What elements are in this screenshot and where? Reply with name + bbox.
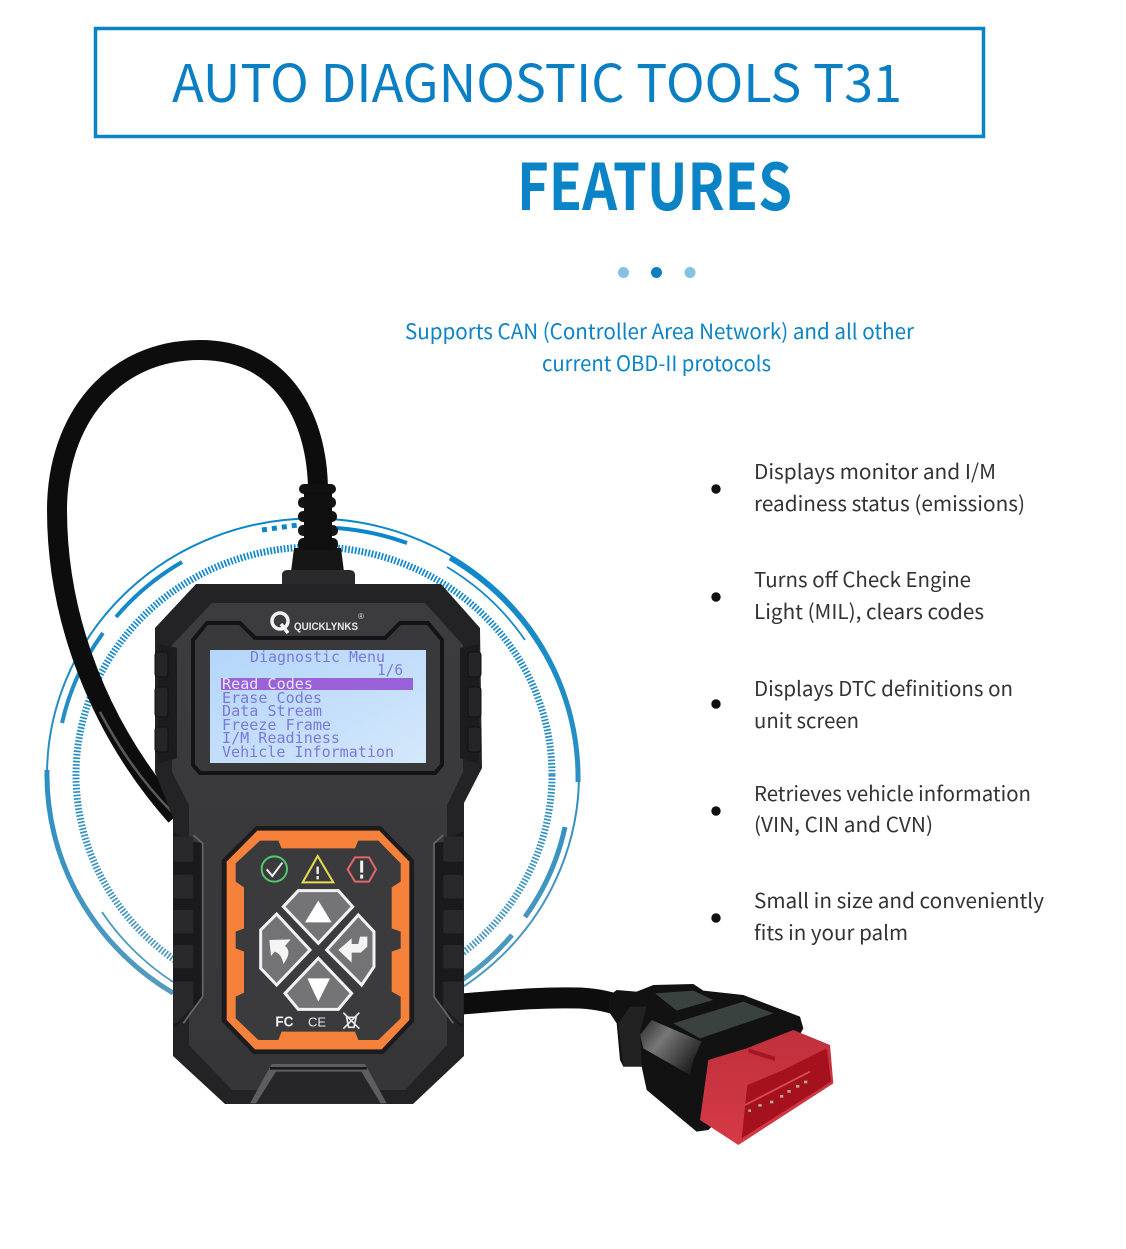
status icon: error — [348, 857, 376, 882]
button: up — [283, 891, 353, 943]
intro text: Supports CAN (Controller Area Network) and all other — [405, 316, 915, 346]
brand logo: ® — [358, 612, 364, 621]
LCD screen: Erase Codes — [222, 689, 322, 707]
feature 2: Light (MIL), clears codes — [754, 595, 984, 625]
intro text: current OBD-II protocols — [542, 348, 771, 378]
LCD screen: Data Stream — [222, 702, 322, 720]
feature 4: (VIN, CIN and CVN) — [754, 808, 933, 838]
bottom trapezoid — [250, 1064, 387, 1103]
feature 5: fits in your palm — [754, 916, 908, 946]
selected row bar — [221, 678, 413, 690]
feature 4: Retrieves vehicle information — [754, 777, 1031, 807]
feature 3 — [711, 672, 1013, 734]
red plug — [700, 1030, 833, 1145]
LCD screen — [210, 648, 426, 763]
intro text — [405, 316, 915, 378]
lower device details — [173, 826, 463, 1103]
boot highlight facets — [618, 991, 773, 1075]
feature 2: Turns off Check Engine — [754, 563, 971, 593]
LCD screen: I/M Readiness — [222, 729, 340, 747]
feature 1 — [711, 455, 1025, 517]
button: left back — [261, 914, 310, 985]
button: right enter — [327, 915, 374, 985]
three dots divider — [618, 267, 696, 278]
cable: upper loop — [57, 350, 318, 816]
feature 1: readiness status (emissions) — [754, 487, 1025, 517]
feature 3: unit screen — [754, 704, 859, 734]
status icon: ok — [262, 856, 287, 882]
feature 2 — [711, 563, 984, 625]
strain relief — [282, 484, 355, 590]
feature 1: Displays monitor and I/M — [754, 455, 996, 485]
body inner face — [172, 603, 463, 1090]
LCD screen: Read Codes — [222, 675, 313, 693]
feature 5 — [711, 884, 1044, 946]
feature list — [711, 455, 1044, 946]
feature 4 — [711, 777, 1031, 838]
cable: lower to connector — [462, 998, 622, 1006]
certification marks — [275, 1013, 359, 1031]
title box — [96, 28, 984, 136]
keypad panel — [222, 826, 414, 1054]
brand logo: QUICKLYNKS — [294, 621, 358, 633]
scanner device — [155, 584, 482, 1104]
decorative tech ring — [47, 518, 579, 1032]
heading: features: FEATURES — [517, 137, 792, 229]
feature 5: Small in size and conveniently — [754, 884, 1044, 914]
certification marks: CE — [308, 1015, 326, 1030]
LCD screen: Diagnostic Menu — [250, 648, 385, 666]
plug pins — [748, 1081, 807, 1112]
upper side grips — [155, 644, 481, 764]
certification marks: FC — [275, 1015, 294, 1031]
LCD screen: 1/6 — [377, 661, 403, 679]
screen bezel — [193, 623, 442, 773]
status icon: warning — [303, 856, 333, 882]
lower right grips — [434, 832, 463, 1027]
lower left grips — [173, 832, 203, 1027]
brand logo — [272, 612, 364, 633]
device body — [155, 584, 482, 1104]
feature 3: Displays DTC definitions on — [754, 672, 1013, 702]
OBD connector — [608, 984, 833, 1145]
title text: AUTO DIAGNOSTIC TOOLS T31 — [172, 42, 902, 117]
connector boot — [608, 984, 803, 1132]
LCD screen: Freeze Frame — [222, 716, 331, 734]
LCD screen: Vehicle Information — [222, 743, 394, 761]
button: down — [285, 958, 352, 1009]
